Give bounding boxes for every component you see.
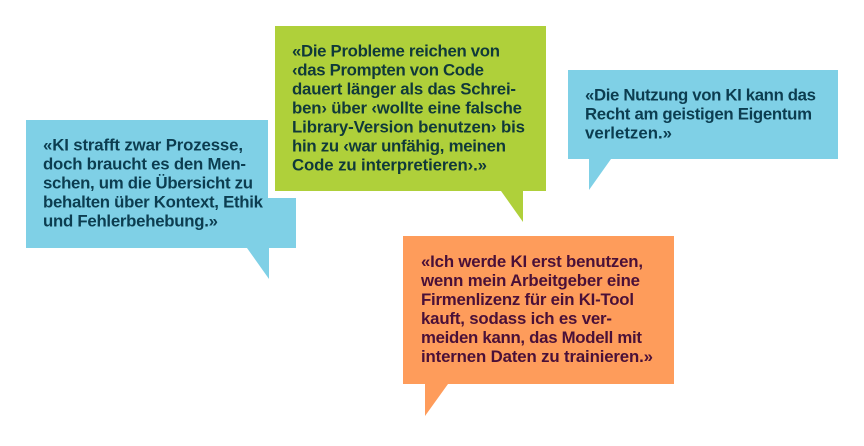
quote text: KI strafft Prozesse: «KI strafft zwar Prozesse, <box>43 136 243 155</box>
quote text: Firmenlizenz: kauft, sodass ich es ver- <box>421 309 612 328</box>
bubble shape with tail <box>275 26 546 222</box>
quote text: geistiges Eigentum <box>585 86 816 143</box>
panel: left blue speech bubble <box>26 120 296 279</box>
quote text: Probleme beim Prompten: «Die Probleme reichen von <box>292 42 500 61</box>
quote text: Probleme beim Prompten: dauert länger als das Schrei- <box>292 80 516 99</box>
quote text: Firmenlizenz: wenn mein Arbeitgeber eine <box>420 271 640 290</box>
quote text: KI strafft Prozesse: schen, um die Übersicht zu <box>43 174 253 193</box>
quote text: geistiges Eigentum: Recht am geistigen Eigentum <box>585 105 812 124</box>
panel: right blue speech bubble <box>568 70 838 190</box>
quote text: Probleme beim Prompten <box>292 42 525 175</box>
quote text: KI strafft Prozesse <box>43 136 264 231</box>
panel: orange speech bubble <box>403 236 674 416</box>
quote text: KI strafft Prozesse: doch braucht es den Men- <box>43 155 246 174</box>
quote text: Probleme beim Prompten: Code zu interpretieren›.» <box>292 156 487 175</box>
quote text: geistiges Eigentum: «Die Nutzung von KI kann das <box>585 86 816 105</box>
quote text: Firmenlizenz: internen Daten zu trainieren.» <box>421 347 653 366</box>
bubble shape with tail <box>403 236 674 416</box>
bubble shape with tail <box>26 120 296 279</box>
quote text: Firmenlizenz: Firmenlizenz für ein KI-Tool <box>421 290 634 309</box>
quote text: Firmenlizenz: «Ich werde KI erst benutzen, <box>421 252 643 271</box>
quote text: KI strafft Prozesse: und Fehlerbehebung.» <box>43 212 218 231</box>
panel: green speech bubble <box>275 26 546 222</box>
quote text: Probleme beim Prompten: hin zu ‹war unfähig, meinen <box>292 137 506 156</box>
quote text: Firmenlizenz: meiden kann, das Modell mit <box>421 328 642 347</box>
quote text: Probleme beim Prompten: ‹das Prompten von Code <box>292 61 484 80</box>
quote text: Probleme beim Prompten: ben› über ‹wollte eine falsche <box>292 99 522 118</box>
quote text: Probleme beim Prompten: Library-Version benutzen› bis <box>292 118 525 137</box>
quote text: geistiges Eigentum: verletzen.» <box>585 124 672 143</box>
quote text: KI strafft Prozesse: behalten über Kontext, Ethik <box>43 193 264 212</box>
quote text: Firmenlizenz <box>420 252 653 366</box>
bubble shape with tail <box>568 70 838 190</box>
